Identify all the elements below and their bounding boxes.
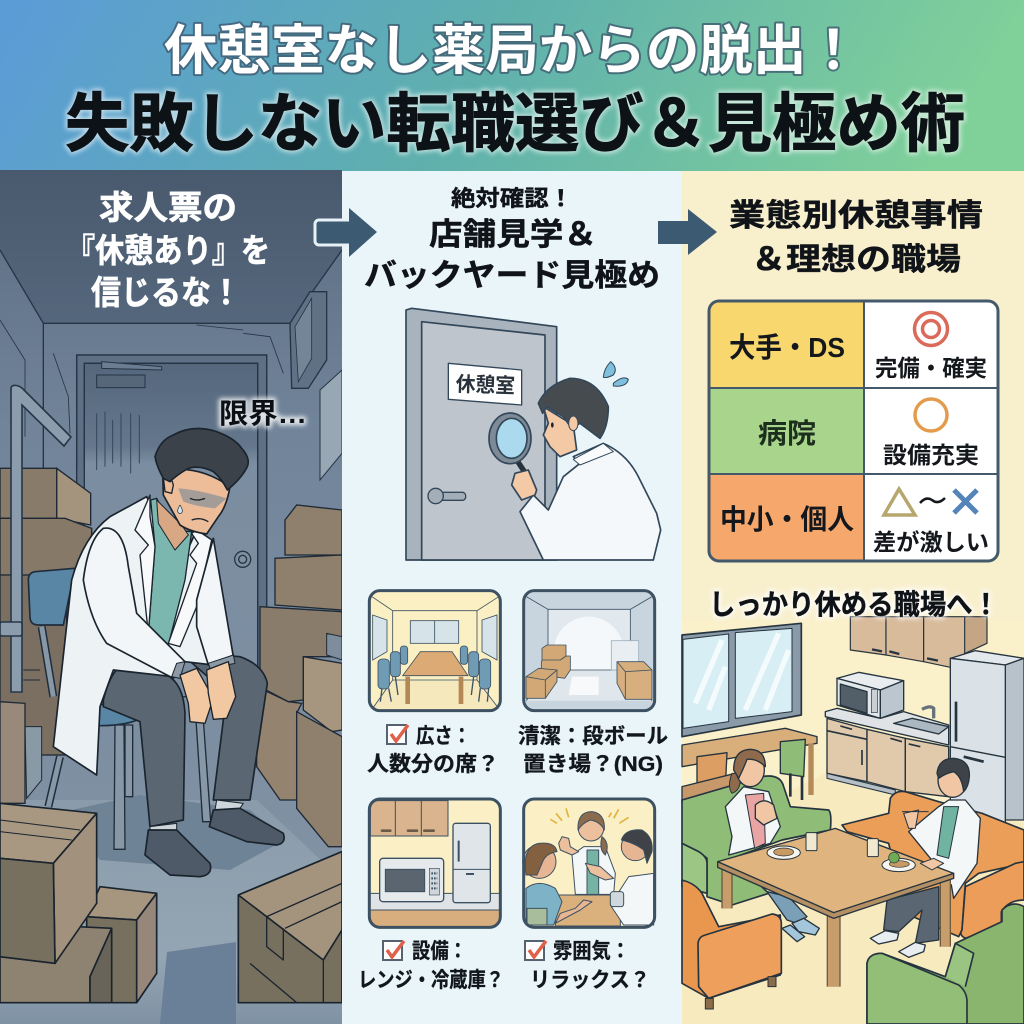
arrow: left to center [315, 208, 377, 257]
hands [180, 662, 236, 723]
row: 中小・個人 [720, 489, 989, 555]
front green sofa [867, 904, 1024, 1024]
box C [0, 927, 112, 1003]
center heading: バックヤード見極め [364, 258, 660, 293]
check label: 広さ [367, 725, 499, 776]
orange sofa arm [961, 862, 1024, 938]
speech: 限界: 限界… [219, 398, 307, 429]
door scene [406, 308, 661, 560]
title line 1: 休憩室なし薬局からの脱出！ [164, 21, 860, 81]
panel: center [342, 171, 682, 1024]
check label: 設備: 設備： [412, 940, 467, 963]
center table [718, 828, 954, 987]
front right box [238, 852, 342, 1003]
window [682, 623, 801, 737]
right heading: ＆理想の職場 [751, 242, 961, 277]
orange sofa [842, 791, 1024, 937]
chairs [378, 646, 491, 689]
door sign [448, 363, 522, 405]
check label: 設備 [358, 940, 504, 992]
center heading: 店舗見学＆ [429, 217, 597, 252]
boxes behind right [257, 505, 342, 847]
check label: 清潔: 清潔：段ボール [518, 725, 668, 748]
back table [682, 728, 817, 803]
socks [150, 800, 243, 837]
box A [0, 803, 97, 863]
room structure [0, 170, 342, 697]
lounge illustration [682, 617, 1024, 1024]
row: 病院: 設備充実 [883, 442, 979, 468]
row: 大手・DS [729, 312, 987, 381]
check label: 清潔 [518, 725, 668, 776]
front orange chair [682, 880, 781, 1009]
magnifier [517, 460, 527, 475]
door sign: 休憩室 [455, 373, 515, 398]
woman [572, 847, 615, 894]
door [77, 355, 267, 697]
header banner [0, 0, 1024, 171]
left heading: 求人票の [99, 189, 237, 226]
box B [87, 887, 157, 920]
foreground boxes [0, 803, 342, 1003]
card: cluttered room [524, 591, 655, 711]
left heading [66, 189, 270, 311]
right person [610, 873, 654, 925]
row: 中小・個人: 中小・個人 [720, 504, 854, 535]
head [155, 429, 248, 550]
check label: 広さ: 人数分の席？ [367, 753, 499, 776]
cabinets [850, 617, 987, 667]
shoes [145, 808, 284, 877]
card: spacious room [369, 591, 500, 711]
speech: 限界: 限界… [219, 398, 307, 429]
man [870, 758, 980, 957]
check label: 清潔: 置き場？(NG) [523, 753, 663, 776]
table [555, 895, 620, 926]
left heading: 『休憩あり』を [66, 232, 270, 269]
right slogan: しっかり休める職場へ！ [709, 589, 999, 620]
check label: 雰囲気: リラックス？ [530, 969, 650, 992]
shirt [148, 498, 192, 645]
comparison table [709, 301, 998, 561]
microwave [837, 672, 904, 718]
left heading: 信じるな！ [91, 274, 241, 311]
chair [28, 568, 211, 849]
title line 2: 失敗しない転職選び＆見極め術 [65, 88, 965, 160]
panel: right [682, 171, 1024, 1024]
door handle [428, 488, 466, 504]
center heading: 絶対確認！ [451, 186, 573, 211]
row: 大手・DS: 大手・DS [729, 332, 845, 363]
sitting pharmacist [53, 495, 284, 877]
right slogan: しっかり休める職場へ！ [709, 589, 999, 620]
title line 1: 休憩室なし薬局からの脱出！ [164, 21, 860, 81]
right heading [729, 198, 983, 277]
card: atmosphere [523, 799, 655, 927]
lapels [135, 495, 212, 647]
fridge [950, 651, 1024, 823]
check label: 雰囲気 [525, 940, 650, 992]
fridge ghost [611, 641, 639, 670]
inspector [489, 362, 661, 560]
check label: 設備: レンジ・冷蔵庫？ [358, 969, 504, 992]
fridge [453, 823, 490, 903]
pipe [0, 385, 71, 692]
check icon [525, 941, 546, 960]
legs [103, 647, 267, 827]
boxes [526, 645, 652, 699]
row: 中小・個人: 差が激しい [873, 529, 989, 555]
woman [725, 749, 819, 942]
floor [0, 800, 342, 1024]
card: equipment [369, 799, 500, 927]
left person [526, 883, 562, 925]
check label: 広さ: 広さ： [416, 725, 471, 748]
wall box and frame [290, 292, 342, 480]
check icon [383, 941, 404, 960]
title line 2: 失敗しない転職選び＆見極め術 [65, 88, 965, 160]
arrow: center to right [658, 209, 717, 255]
row: 病院 [758, 399, 979, 468]
hand on table [920, 858, 944, 870]
check icon [387, 725, 408, 744]
center heading [364, 186, 660, 293]
sleeve [83, 528, 185, 678]
counter [825, 707, 949, 797]
boxes behind left [0, 468, 92, 803]
row: 大手・DS: 完備・確実 [875, 355, 987, 381]
row: 病院: 病院 [758, 418, 816, 449]
green sofa [682, 776, 831, 905]
check label: 雰囲気: 雰囲気： [553, 940, 630, 963]
right heading: 業態別休憩事情 [729, 198, 983, 233]
microwave [380, 858, 444, 902]
coat [53, 497, 233, 775]
panel: left, storage room [0, 170, 342, 1024]
